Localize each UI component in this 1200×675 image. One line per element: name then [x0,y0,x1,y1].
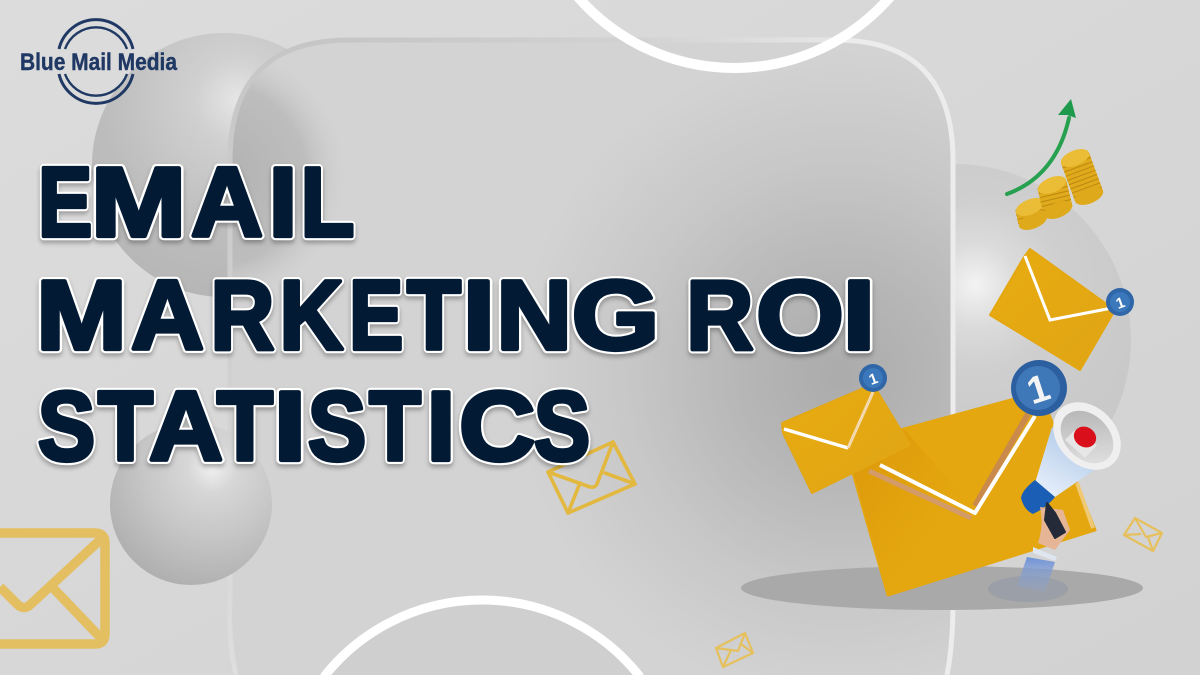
title line: STATISTICS: T [98,371,153,481]
title line: MARKETING ROI: N [496,260,572,370]
sphere: top left [92,33,356,297]
title line: MARKETING ROI: M [36,260,127,370]
white arc: bottom [324,600,640,675]
title line: STATISTICS: T [369,371,421,481]
envelope: large center [845,360,1095,595]
handle [1045,503,1065,538]
title line: EMAIL: M [91,147,186,257]
title line: MARKETING ROI: K [280,260,343,370]
title line: MARKETING ROI: T [407,260,461,370]
title line: MARKETING ROI: A [131,260,204,370]
title line: EMAIL: A [191,147,263,257]
title line: STATISTICS: I [274,371,306,481]
title line: EMAIL [38,147,354,257]
icon: growth arrow [1007,99,1076,194]
title line: STATISTICS: S [38,371,95,481]
title line: MARKETING ROI: E [349,260,403,370]
title line: EMAIL: E [38,147,92,257]
title line: STATISTICS: C [459,371,535,481]
title line: STATISTICS: A [149,371,223,481]
title line: MARKETING ROI: E [349,260,403,370]
title line: STATISTICS: S [308,371,366,481]
title line: EMAIL: I [269,147,297,257]
title line: STATISTICS: T [98,371,153,481]
title line: STATISTICS: I [274,371,306,481]
sphere: right [779,164,1131,516]
badge: 1 [867,370,880,389]
title [36,147,875,481]
coin stack large [1058,145,1106,209]
title line: STATISTICS [38,371,590,481]
badge: 1 [1114,294,1127,313]
rounded glass panel [230,40,953,675]
title line: MARKETING ROI: O [756,260,844,370]
coin stack small [1013,194,1050,234]
title line: MARKETING ROI: R [686,260,753,370]
title line: MARKETING ROI: I [843,260,875,370]
title line: STATISTICS: T [369,371,421,481]
title line: MARKETING ROI: G [572,260,659,370]
title line: MARKETING ROI: M [36,260,127,370]
title line: EMAIL: A [191,147,263,257]
title line: MARKETING ROI: O [756,260,844,370]
logo: Blue Mail Media: Blue Mail Media [20,49,178,76]
title line: EMAIL: E [38,147,92,257]
title line: STATISTICS: S [38,371,95,481]
title line: EMAIL: M [91,147,186,257]
icon: outline envelope large left [0,533,105,644]
title line: STATISTICS: S [534,371,590,481]
title line: MARKETING ROI [36,260,875,370]
title line: MARKETING ROI: G [572,260,659,370]
cone [1035,427,1100,497]
blue base [1021,480,1055,514]
envelope: small left [782,364,910,493]
title line: MARKETING ROI: I [843,260,875,370]
title line: MARKETING ROI: K [280,260,343,370]
icon: outline envelope small bottom [716,633,753,667]
badge: 1 [1022,367,1055,413]
title line: MARKETING ROI: R [686,260,753,370]
title line: STATISTICS: A [149,371,223,481]
envelope: top right [990,249,1134,370]
ground shadow [741,566,1143,610]
mouth [1040,389,1134,483]
title line: MARKETING ROI: A [131,260,204,370]
title line: STATISTICS: C [459,371,535,481]
title line: MARKETING ROI: N [496,260,572,370]
arm [988,547,1068,602]
icon: outline envelope middle [548,442,635,513]
title line: MARKETING ROI: T [407,260,461,370]
title line: STATISTICS: S [308,371,366,481]
icon: outline envelope small right [1124,518,1162,551]
icon: coin stacks [1013,145,1106,234]
title line: MARKETING ROI: I [463,260,495,370]
title line: STATISTICS: T [217,371,273,481]
title line: STATISTICS: I [427,371,455,481]
title line: STATISTICS: S [534,371,590,481]
badge [1011,360,1067,416]
title line: EMAIL: I [269,147,297,257]
title line: STATISTICS: T [217,371,273,481]
coin stack medium [1035,172,1075,223]
hand [1038,507,1070,550]
title line: MARKETING ROI: R [210,260,274,370]
badge [1106,288,1134,316]
sphere: bottom left [110,423,272,585]
logo: Blue Mail Media [20,20,178,103]
title line: MARKETING ROI: I [463,260,495,370]
title line: EMAIL: L [300,147,354,257]
title line: EMAIL: L [300,147,354,257]
title line: MARKETING ROI: R [210,260,274,370]
title line: STATISTICS: I [427,371,455,481]
white arc: top [577,0,891,68]
icon: megaphone with hand [988,389,1134,602]
